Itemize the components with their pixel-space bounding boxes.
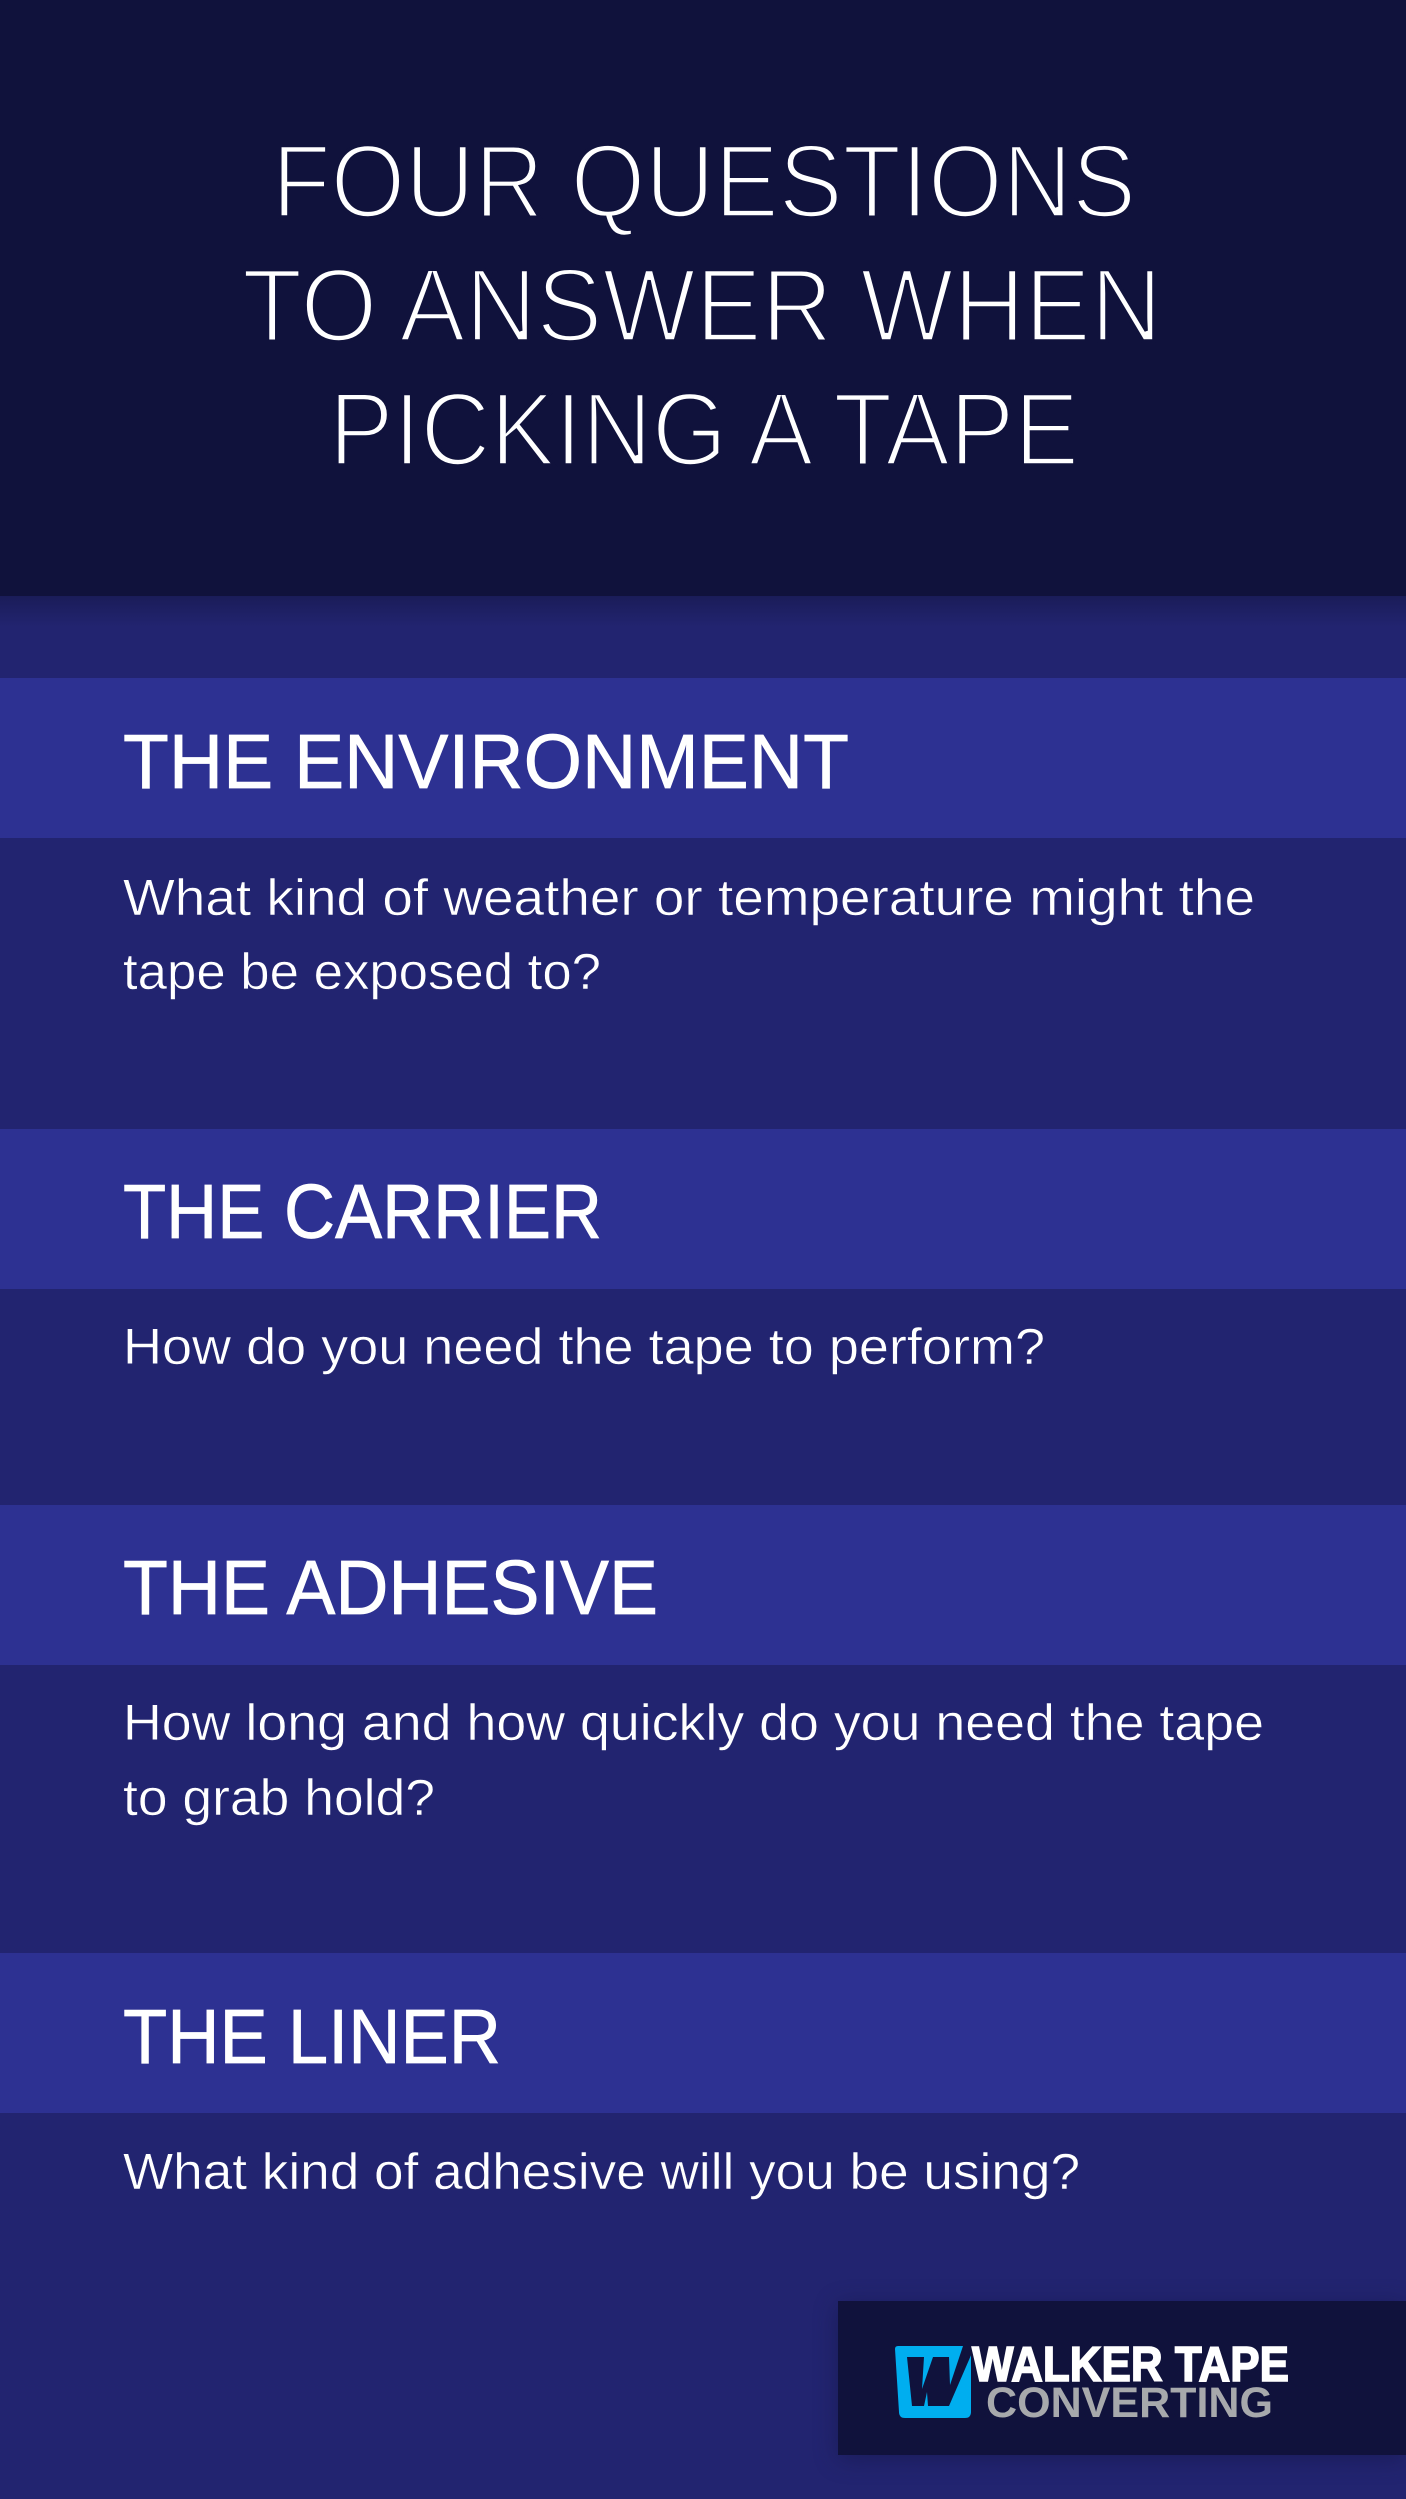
text: adhesive question — [123, 1694, 1264, 1826]
text: environment question: What kind of weather or temperature might the — [123, 869, 1255, 926]
header panel with title — [0, 0, 1406, 596]
logo text: converting: CONVERTING — [986, 2379, 1273, 2427]
panel: the adhesive — [0, 1505, 1406, 1826]
heading: the carrier: THE CARRIER — [123, 1169, 602, 1255]
text: environment question — [123, 869, 1255, 1000]
text: environment question: tape be exposed to? — [123, 943, 601, 1000]
heading: the adhesive: THE ADHESIVE — [123, 1545, 658, 1631]
icon: walker tape W badge — [895, 2346, 975, 2418]
text: liner question: What kind of adhesive will you be using? — [123, 2143, 1080, 2200]
panel: the environment — [0, 678, 1406, 1000]
title: TO ANSWER WHEN — [242, 248, 1162, 364]
text: carrier question: How do you need the tape to perform? — [123, 1318, 1045, 1375]
title: PICKING A TAPE — [329, 372, 1079, 488]
logo text: walker tape: WALKER TAPE — [972, 2338, 1289, 2392]
heading: the environment: THE ENVIRONMENT — [123, 719, 849, 805]
heading: the liner: THE LINER — [123, 1994, 501, 2080]
text: adhesive question: to grab hold? — [123, 1769, 435, 1826]
title: FOUR QUESTIONS — [272, 124, 1136, 240]
panel: the carrier — [0, 1129, 1406, 1375]
title — [242, 124, 1162, 488]
panel: the liner — [0, 1953, 1406, 2200]
logo panel — [838, 2301, 1406, 2455]
text: adhesive question: How long and how quickly do you need the tape — [123, 1694, 1264, 1751]
